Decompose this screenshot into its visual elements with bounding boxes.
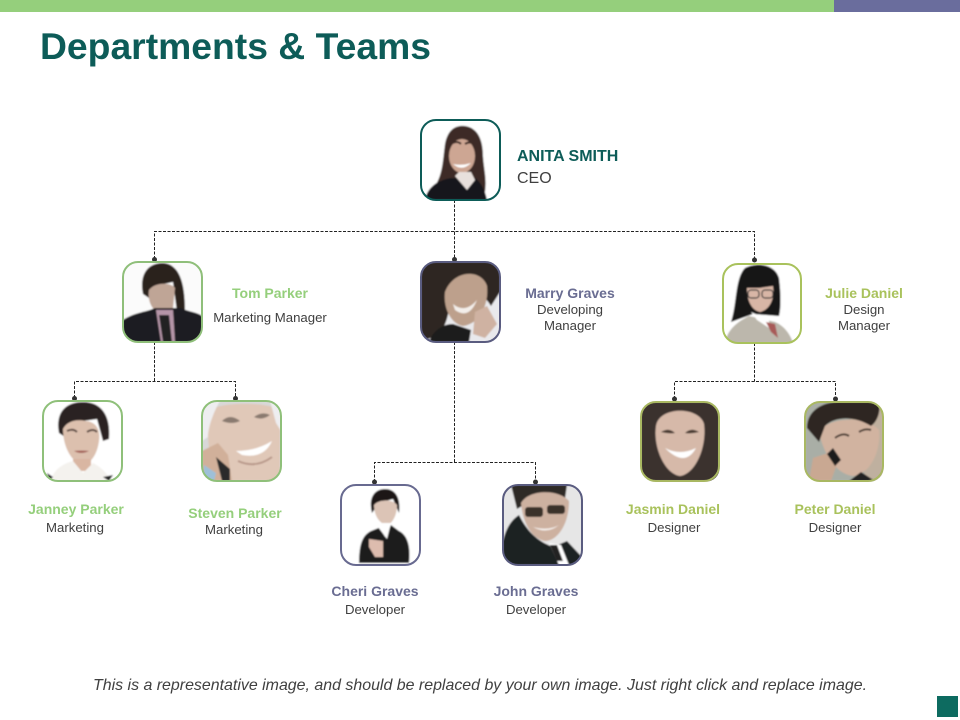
name: Julie Daniel: Manager <box>838 318 891 333</box>
name: Cheri Graves: Developer <box>345 602 406 617</box>
title: Departments & Teams <box>40 26 431 67</box>
name: Janney Parker: Marketing <box>46 520 104 535</box>
portrait: Marry Graves <box>421 262 500 342</box>
name: Julie Daniel: Julie Daniel <box>825 285 903 301</box>
name: Anita Smith: CEO <box>517 170 552 187</box>
name: Steven Parker: Steven Parker <box>188 505 282 521</box>
name: Janney Parker <box>28 501 124 535</box>
name: Julie Daniel: Design <box>843 302 885 317</box>
portrait: Cheri Graves <box>341 485 420 565</box>
name: Jasmin Daniel: Jasmin Daniel <box>626 501 720 517</box>
name: Marry Graves: Marry Graves <box>525 285 615 301</box>
name: John Graves: Developer <box>506 602 567 617</box>
name: Janney Parker: Janney Parker <box>28 501 124 517</box>
name: Cheri Graves <box>331 583 419 617</box>
portrait: Peter Daniel <box>805 402 883 481</box>
name: Marry Graves: Manager <box>544 318 597 333</box>
name: Cheri Graves: Cheri Graves <box>331 583 419 599</box>
portrait: Tom Parker <box>123 262 202 342</box>
corner square <box>937 696 958 717</box>
footnote: This is a representative image, and should be replaced by your own image. Just right click and replace image. <box>93 677 867 694</box>
name: Peter Daniel <box>795 501 875 535</box>
name: Tom Parker: Marketing Manager <box>213 310 327 325</box>
name: John Graves: John Graves <box>494 583 579 599</box>
portrait: John Graves <box>503 485 582 565</box>
portrait: Julie Daniel <box>723 264 801 343</box>
name: Anita Smith: ANITA SMITH <box>517 148 618 165</box>
name: Marry Graves <box>525 285 615 333</box>
name: John Graves <box>494 583 579 617</box>
name: Jasmin Daniel: Designer <box>648 520 701 535</box>
portrait: Jasmin Daniel <box>641 402 719 481</box>
name: Tom Parker: Tom Parker <box>232 285 309 301</box>
portrait: Anita Smith <box>421 120 500 200</box>
connector lines <box>72 200 838 484</box>
name: Steven Parker: Marketing <box>205 522 263 537</box>
top accent bar <box>0 0 960 12</box>
portrait: Janney Parker <box>43 401 122 481</box>
name: Steven Parker <box>188 505 282 537</box>
name: Jasmin Daniel <box>626 501 720 535</box>
portrait: Steven Parker <box>202 401 281 481</box>
name: Anita Smith <box>517 148 618 187</box>
name: Julie Daniel <box>825 285 903 333</box>
name: Peter Daniel: Peter Daniel <box>795 501 875 517</box>
name: Peter Daniel: Designer <box>809 520 862 535</box>
name: Marry Graves: Developing <box>537 302 603 317</box>
name: Tom Parker <box>213 285 327 325</box>
